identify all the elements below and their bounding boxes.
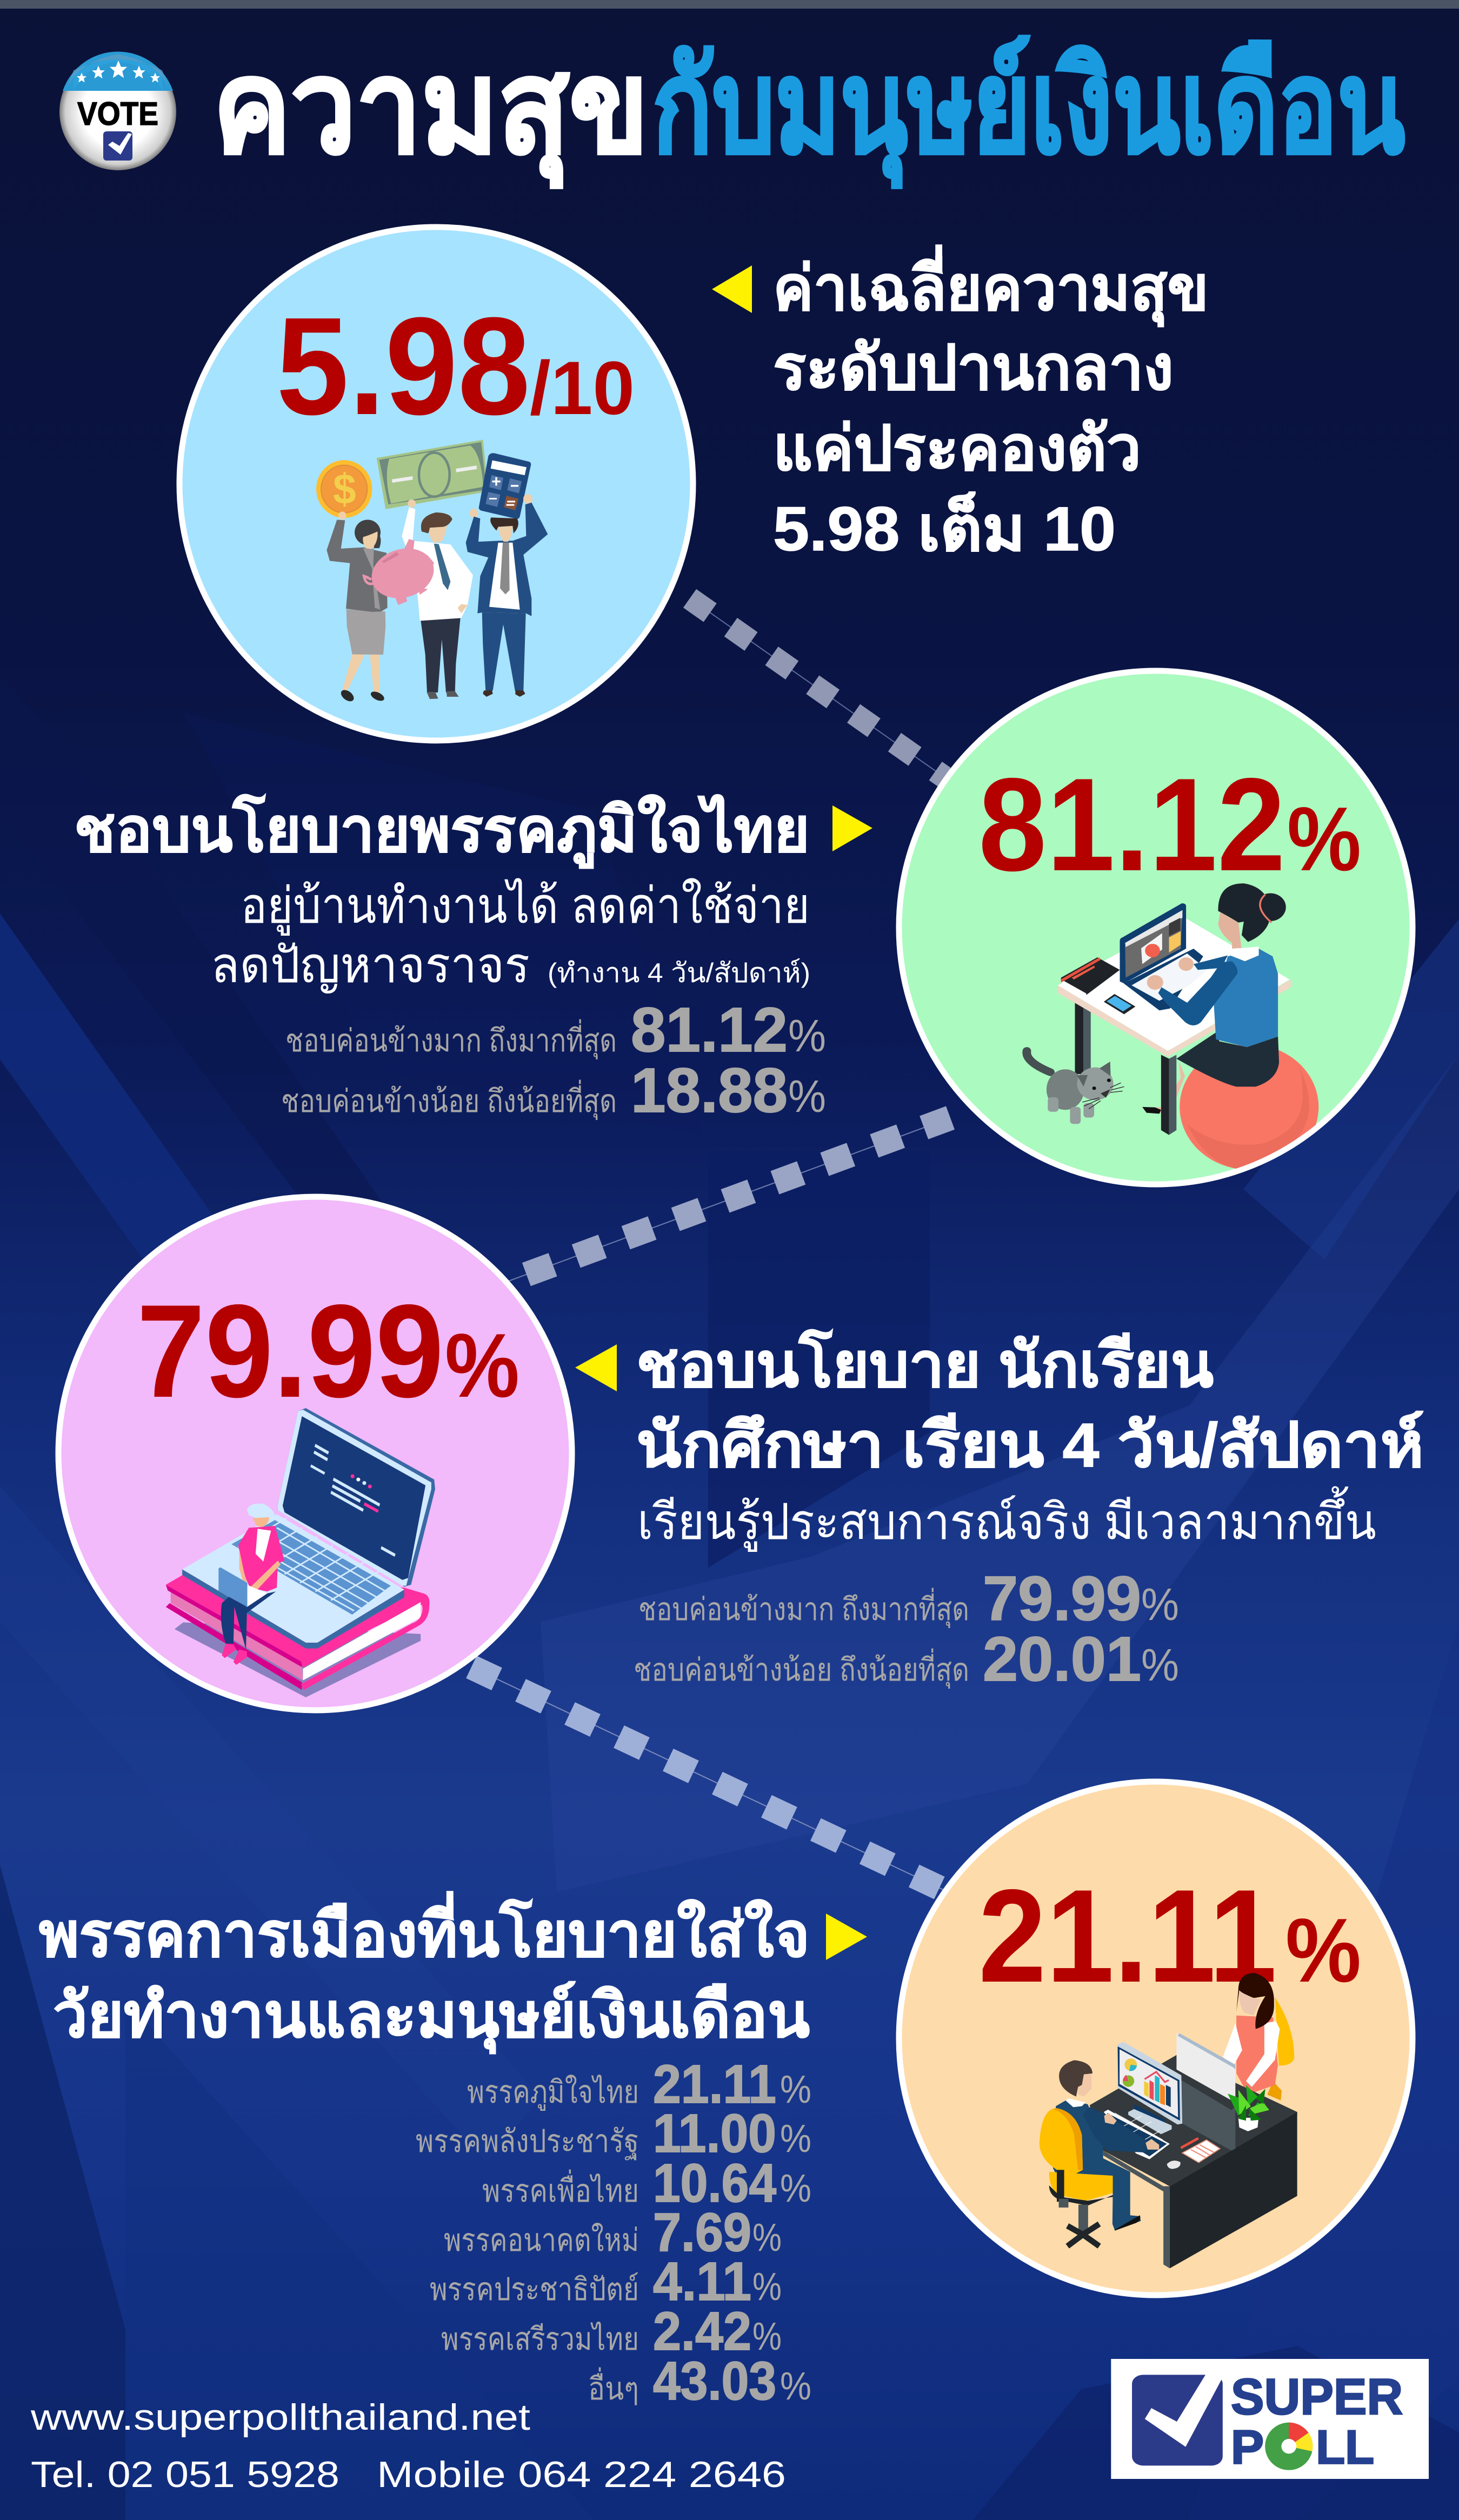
percentage value: 21.11 xyxy=(978,1862,1277,2010)
party results list: พรรคภูมิใจไทย xyxy=(467,2074,639,2111)
text block: happiness average xyxy=(773,245,1209,564)
party results list: 21.11 xyxy=(653,2054,776,2115)
stats: work from home: 81.12 xyxy=(631,995,788,1065)
percentage value: 79.99 xyxy=(137,1277,444,1425)
icon: people holding money: $ xyxy=(333,464,356,513)
title: ความสุข xyxy=(213,35,649,188)
footer contact xyxy=(30,2397,786,2495)
icon: people holding money xyxy=(316,439,548,704)
text block: work from home policy xyxy=(74,794,810,994)
logo: super poll xyxy=(1111,2359,1429,2479)
text block: work from home policy: (ทำงาน 4 วัน/สัปดาห์) xyxy=(548,958,810,988)
footer contact: www.superpollthailand.net xyxy=(30,2397,530,2438)
text block: happiness average: 5.98 เต็ม 10 xyxy=(773,491,1116,564)
text block: four day study policy: นักศึกษา เรียน 4 วัน/สัปดาห์ xyxy=(636,1411,1424,1480)
stats: four day study: ชอบค่อนข้างน้อย ถึงน้อยที่สุด xyxy=(634,1648,969,1689)
dotted connector: circle 2 to circle 3 xyxy=(487,1118,950,1289)
text block: happiness average: แค่ประคองตัว xyxy=(773,414,1141,483)
text block: happiness average: ค่าเฉลี่ยความสุข xyxy=(773,245,1209,327)
panel: four day study circle xyxy=(58,1197,572,1710)
party results list: พรรคเพื่อไทย xyxy=(482,2169,639,2209)
icon: people holding money: + xyxy=(491,472,501,491)
party results list: อื่นๆ xyxy=(588,2367,639,2406)
logo: super poll: SUPER xyxy=(1231,2369,1403,2425)
party results list: 10.64 xyxy=(653,2153,776,2214)
party results list: 2.42 xyxy=(653,2301,751,2362)
icon: vote badge: VOTE xyxy=(77,96,158,132)
party results list: % xyxy=(780,2117,811,2161)
stats: work from home: ชอบค่อนข้างน้อย ถึงน้อยที่สุด xyxy=(281,1079,617,1121)
logo: super poll: P xyxy=(1231,2421,1264,2474)
stats: work from home: % xyxy=(788,1010,826,1061)
party results list: % xyxy=(752,2216,782,2259)
arrow: left to study circle xyxy=(575,1344,617,1391)
panel: work from home circle xyxy=(899,671,1413,1184)
stats: work from home: ชอบค่อนข้างมาก ถึงมากที่สุด xyxy=(285,1019,617,1060)
party results list: พรรคประชาธิปัตย์ xyxy=(430,2272,639,2307)
party results list: 43.03 xyxy=(653,2351,776,2411)
text block: work from home policy: อยู่บ้านทำงานได้ ลดค่าใช้จ่าย xyxy=(241,878,810,936)
icon: two office workers at desk xyxy=(1040,1973,1297,2268)
heading: party that cares about workers: วัยทำงานและมนุษย์เงินเดือน xyxy=(53,1981,810,2054)
stats: four day study: 79.99 xyxy=(983,1563,1141,1634)
icon: woman working at desk with cat xyxy=(1027,883,1318,1170)
stats: four day study xyxy=(634,1563,1179,1694)
text block: work from home policy: ชอบนโยบายพรรคภูมิใจไทย xyxy=(74,794,810,869)
percentage value: % xyxy=(1287,788,1361,890)
dotted connector: circle 3 to circle 4 xyxy=(471,1667,973,1904)
text block: happiness average: ระดับปานกลาง xyxy=(773,334,1174,403)
percentage value: % xyxy=(445,1315,519,1416)
score value: 5.98 xyxy=(276,289,530,444)
party results list: % xyxy=(752,2265,782,2309)
text block: work from home policy: ลดปัญหาจราจร xyxy=(211,938,530,994)
panel: party circle xyxy=(899,1782,1413,2295)
party results list: % xyxy=(780,2365,811,2408)
panel: happiness score circle xyxy=(179,227,693,741)
stats: work from home xyxy=(281,995,826,1125)
stats: four day study: % xyxy=(1141,1639,1179,1690)
footer contact: Tel. 02 051 5928 xyxy=(31,2454,339,2495)
heading: party that cares about workers xyxy=(39,1891,810,2054)
score value: /10 xyxy=(530,345,635,430)
icon: vote badge xyxy=(59,51,176,170)
arrow: right to party circle xyxy=(826,1914,867,1960)
stats: work from home: % xyxy=(788,1071,826,1122)
party results list: พรรคอนาคตใหม่ xyxy=(444,2222,639,2258)
party results list: พรรคพลังประชารัฐ xyxy=(416,2124,639,2160)
title xyxy=(213,35,1405,188)
party results list: 7.69 xyxy=(653,2202,751,2263)
arrow: right to work from home circle xyxy=(832,805,872,851)
party results list: % xyxy=(780,2167,811,2210)
stats: work from home: 18.88 xyxy=(631,1055,788,1125)
party results list: % xyxy=(752,2315,782,2358)
logo: super poll: LL xyxy=(1316,2421,1374,2474)
heading: party that cares about workers: พรรคการเมืองที่นโยบายใส่ใจ xyxy=(39,1891,810,1970)
percentage value: % xyxy=(1285,1899,1361,2001)
stats: four day study: 20.01 xyxy=(983,1624,1141,1694)
stats: four day study: % xyxy=(1141,1579,1179,1630)
stats: four day study: ชอบค่อนข้างมาก ถึงมากที่สุด xyxy=(638,1588,969,1629)
party results list: % xyxy=(780,2068,811,2111)
party results list: 11.00 xyxy=(653,2103,776,2164)
percentage value: 81.12 xyxy=(978,750,1285,898)
party results list: พรรคเสรีรวมไทย xyxy=(441,2321,639,2357)
text block: four day study policy: ชอบนโยบาย นักเรียน xyxy=(636,1329,1214,1400)
dotted connector: circle 1 to circle 2 xyxy=(690,598,973,797)
party results list xyxy=(416,2054,811,2411)
party results list: 4.11 xyxy=(653,2251,751,2312)
arrow: left to score xyxy=(712,265,752,313)
text block: four day study policy xyxy=(636,1329,1424,1552)
icon: student on giant laptop and books xyxy=(166,1408,435,1697)
footer contact: Mobile 064 224 2646 xyxy=(377,2454,786,2495)
text block: four day study policy: เรียนรู้ประสบการณ์จริง มีเวลามากขึ้น xyxy=(637,1486,1376,1552)
